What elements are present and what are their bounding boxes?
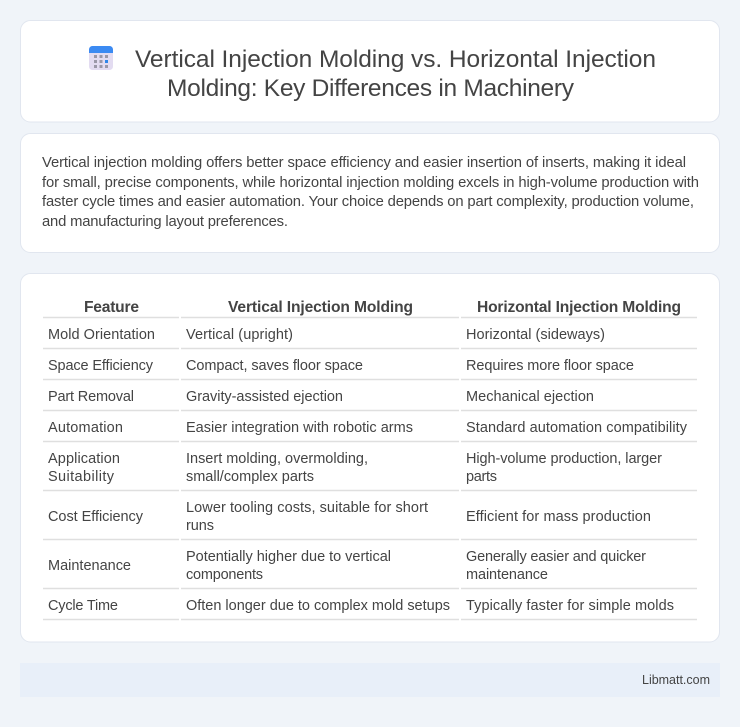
title: Molding: Key Differences in Machinery (167, 75, 575, 102)
row: maintenance: Potentially higher due to vertical (186, 549, 391, 565)
panel: comparison table card (20, 274, 720, 642)
row: cost efficiency: Efficient for mass production (466, 509, 651, 525)
row: space efficiency (48, 358, 634, 374)
text block: summary: faster cycle times and easier automation. Your choice depends on part complexity, production volume, (42, 194, 694, 210)
table row lines (43, 318, 697, 620)
row: cost efficiency: Cost Efficiency (48, 509, 144, 525)
table header: Horizontal Injection Molding (477, 299, 681, 316)
row: maintenance: maintenance (466, 567, 548, 583)
row: cost efficiency (48, 500, 651, 534)
row: cycle time: Typically faster for simple molds (466, 598, 674, 614)
row: cost efficiency: Lower tooling costs, suitable for short (186, 500, 428, 516)
row: part removal: Part Removal (48, 389, 134, 405)
row: mold orientation (48, 327, 605, 343)
row: space efficiency: Requires more floor space (466, 358, 634, 374)
row: maintenance: components (186, 567, 263, 583)
row: mold orientation: Vertical (upright) (186, 327, 293, 343)
row: automation (48, 420, 688, 436)
row: part removal (48, 389, 594, 405)
row: application suitability (48, 451, 662, 485)
row: cycle time: Often longer due to complex mold setups (186, 598, 450, 614)
table header (84, 299, 681, 316)
panel: title card (20, 20, 720, 122)
table header: Feature (84, 299, 139, 316)
row: mold orientation: Mold Orientation (48, 327, 155, 343)
row: cycle time (48, 598, 674, 614)
row: application suitability: Application (48, 451, 120, 467)
row: part removal: Gravity-assisted ejection (186, 389, 343, 405)
row: part removal: Mechanical ejection (466, 389, 594, 405)
row: automation: Easier integration with robotic arms (186, 420, 413, 436)
row: automation: Automation (48, 420, 123, 436)
title (135, 46, 656, 102)
row: space efficiency: Space Efficiency (48, 358, 154, 374)
row: application suitability: Insert molding, overmolding, (186, 451, 368, 467)
row: application suitability: High-volume production, larger (466, 451, 662, 467)
icon: calendar (89, 46, 113, 70)
title: Vertical Injection Molding vs. Horizontal Injection (135, 46, 656, 73)
text block: summary: Vertical injection molding offers better space efficiency and easier insertion of inserts, making it ideal (42, 155, 686, 171)
row: cost efficiency: runs (186, 518, 214, 534)
text block: summary (42, 155, 699, 230)
row: application suitability: Suitability (48, 469, 115, 485)
row: application suitability: parts (466, 469, 497, 485)
row: space efficiency: Compact, saves floor space (186, 358, 363, 374)
row: maintenance: Maintenance (48, 558, 131, 574)
row: mold orientation: Horizontal (sideways) (466, 327, 605, 343)
footer bar (20, 663, 720, 697)
row: maintenance (48, 549, 646, 583)
panel: summary card (20, 134, 720, 252)
row: application suitability: small/complex parts (186, 469, 314, 485)
table header: Vertical Injection Molding (228, 299, 413, 316)
row: maintenance: Generally easier and quicker (466, 549, 646, 565)
row: cycle time: Cycle Time (48, 598, 118, 614)
text block: summary: and manufacturing layout preferences. (42, 214, 288, 230)
row: automation: Standard automation compatibility (466, 420, 688, 436)
text block: summary: for small, precise components, while horizontal injection molding excels in high-volume production with (42, 175, 699, 191)
footer text: Libmatt.com (642, 673, 710, 687)
